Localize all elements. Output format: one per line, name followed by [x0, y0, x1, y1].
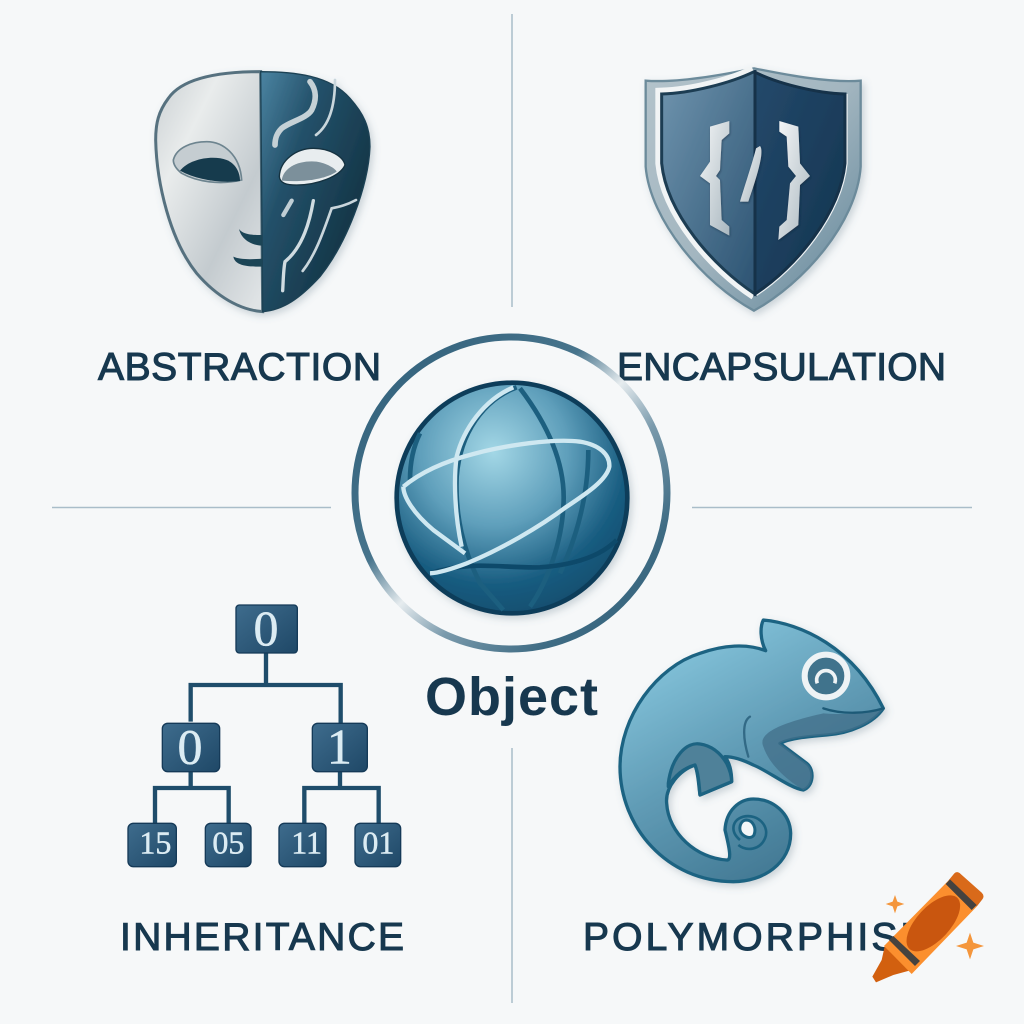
outer ring: [355, 337, 667, 649]
chameleon leg: [668, 744, 732, 795]
icon: half mask: [156, 72, 370, 312]
leaf 05: 05: [212, 824, 244, 860]
tree connectors: [155, 652, 379, 823]
label: polymorphism: POLYMORPHISM: [583, 916, 933, 959]
icon: orange crayon badge: [872, 872, 984, 982]
panel: polymorphism: [583, 620, 933, 959]
chameleon shading: [762, 708, 883, 790]
icon: chameleon: [620, 620, 883, 882]
leaf 01: [355, 823, 401, 867]
label: inheritance: INHERITANCE: [120, 916, 404, 959]
label: encapsulation: ENCAPSULATION: [617, 346, 946, 389]
chameleon limb and mouth lines: [744, 708, 883, 757]
leaf 11: 11: [291, 824, 322, 860]
leaf 01: 01: [362, 824, 394, 860]
node 0: 0: [177, 718, 202, 774]
panel: abstraction: [98, 72, 381, 389]
label: abstraction: ABSTRACTION: [98, 346, 381, 389]
node 0: [162, 718, 220, 774]
icon: globe: [397, 383, 627, 613]
title: object: Object: [425, 667, 598, 727]
leaf 11: [279, 823, 326, 867]
leaf 15: 15: [139, 824, 171, 860]
icon: binary tree: [128, 600, 401, 867]
panel: object: [355, 337, 667, 727]
chameleon eye: [805, 655, 847, 697]
leaf 05: [205, 823, 251, 867]
root node: [236, 600, 297, 656]
leaf 15: [128, 823, 176, 867]
panel: encapsulation: [617, 68, 946, 389]
panel: inheritance: [120, 600, 404, 959]
node 1: [312, 718, 367, 774]
node 1: 1: [327, 718, 352, 774]
root node: 0: [253, 600, 278, 656]
icon: shield with code braces: [646, 68, 861, 311]
chameleon tail curl: [733, 816, 766, 849]
